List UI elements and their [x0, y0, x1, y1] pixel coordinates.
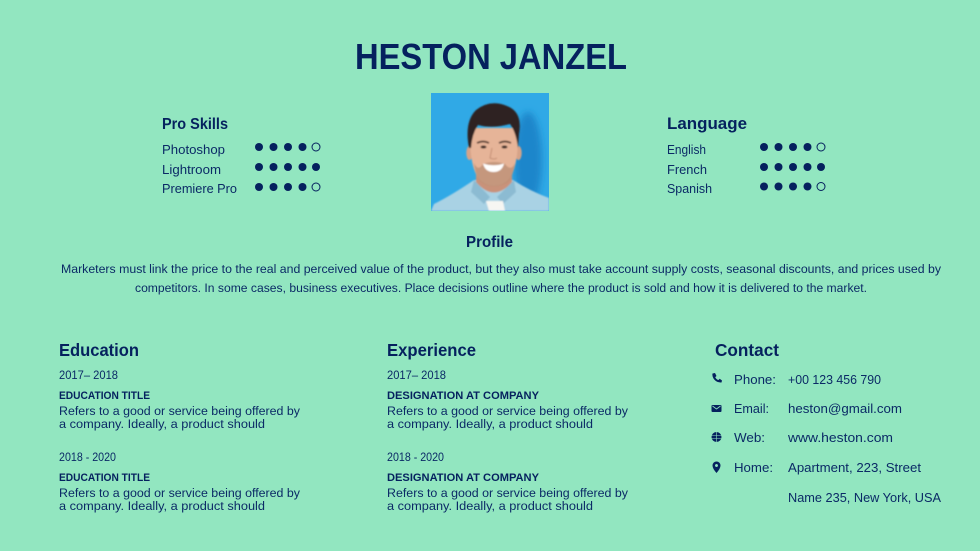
heading: pro skills: Pro Skills [162, 116, 228, 133]
icon: web [712, 432, 722, 442]
education entry 2: EDUCATION TITLE [59, 472, 150, 484]
profile text: competitors. In some cases, business executives. Place decisions outline where the product is sold and how it is delivered to the market. [135, 281, 867, 295]
value: home address [788, 460, 941, 505]
experience entry 1: 2017– 2018 [387, 369, 446, 382]
experience entry 2: a company. Ideally, a product should [387, 499, 593, 513]
skill: premiere pro: Premiere Pro [162, 181, 237, 196]
education entry 2: a company. Ideally, a product should [59, 499, 265, 513]
language: english [667, 142, 825, 157]
experience entry 1 [387, 369, 629, 431]
panel: profile [61, 234, 942, 295]
heading: profile: Profile [466, 234, 513, 251]
experience entry 1: DESIGNATION AT COMPANY [387, 390, 539, 402]
heading: experience: Experience [387, 340, 476, 360]
portrait photo [431, 93, 549, 211]
panel: education [59, 340, 301, 513]
label: phone: Phone: [734, 372, 776, 387]
skill: lightroom [162, 162, 320, 177]
label: web: Web: [734, 430, 765, 445]
label: home: Home: [734, 460, 773, 475]
icon: email [712, 405, 722, 412]
language: english: English [667, 142, 706, 157]
profile text [61, 262, 942, 295]
skill: photoshop [162, 142, 320, 157]
language: french: French [667, 162, 707, 177]
skill: photoshop: Photoshop [162, 142, 225, 157]
experience entry 2: DESIGNATION AT COMPANY [387, 472, 539, 484]
title: HESTON JANZEL [355, 36, 627, 77]
value: home address: Apartment, 223, Street [788, 460, 921, 475]
education entry 1: 2017– 2018 [59, 369, 118, 382]
value: email: heston@gmail.com [788, 401, 902, 416]
experience entry 2: Refers to a good or service being offered by [387, 486, 629, 500]
language: spanish [667, 181, 825, 196]
value: phone: +00 123 456 790 [788, 372, 881, 387]
education entry 2 [59, 451, 301, 513]
icon: home pin [712, 462, 720, 473]
heading: language: Language [667, 115, 747, 133]
profile text: Marketers must link the price to the real and perceived value of the product, but they also must take account supply costs, seasonal discounts, and prices used by [61, 262, 942, 276]
skill: premiere pro [162, 181, 320, 196]
value: home address: Name 235, New York, USA [788, 490, 941, 505]
experience entry 2 [387, 451, 629, 513]
panel: language [667, 115, 825, 196]
education entry 2: 2018 - 2020 [59, 451, 116, 464]
education entry 1: Refers to a good or service being offered by [59, 404, 301, 418]
label: email: Email: [734, 401, 769, 416]
value: web: www.heston.com [787, 430, 893, 445]
panel: contact [712, 340, 941, 505]
education entry 1: EDUCATION TITLE [59, 390, 150, 402]
experience entry 1: a company. Ideally, a product should [387, 417, 593, 431]
language: spanish: Spanish [667, 181, 712, 196]
heading: contact: Contact [715, 340, 779, 360]
experience entry 1: Refers to a good or service being offered by [387, 404, 629, 418]
experience entry 2: 2018 - 2020 [387, 451, 444, 464]
icon: phone [712, 373, 722, 383]
language: french [667, 162, 825, 177]
education entry 2: Refers to a good or service being offered by [59, 486, 301, 500]
panel: pro skills [162, 116, 320, 196]
skill: lightroom: Lightroom [162, 162, 221, 177]
education entry 1 [59, 369, 301, 431]
education entry 1: a company. Ideally, a product should [59, 417, 265, 431]
panel: experience [387, 340, 629, 513]
heading: education: Education [59, 340, 139, 360]
